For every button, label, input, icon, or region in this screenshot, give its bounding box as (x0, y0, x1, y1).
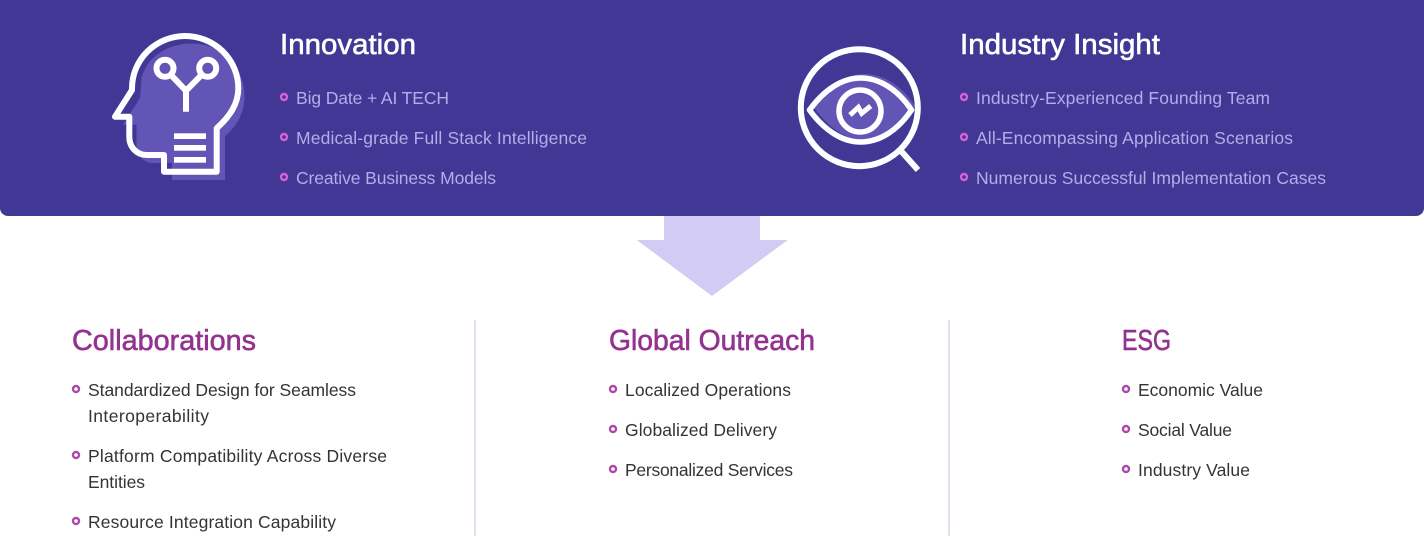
list: Innovation bullets: Medical-grade Full Stack Intelligence (296, 128, 587, 148)
list: Collaborations bullets (73, 380, 387, 532)
icon: magnifying glass with eye (801, 49, 918, 170)
list: Innovation bullets: Big Date + AI TECH (296, 88, 449, 108)
panel: ESG (1122, 325, 1263, 480)
list: Industry Insight bullets: Numerous Successful Implementation Cases (976, 168, 1326, 188)
list: Global Outreach bullets (610, 380, 793, 480)
panel: collaborations (72, 325, 387, 532)
heading: Industry Insight: Industry Insight (960, 29, 1160, 61)
list: Innovation bullets: Creative Business Models (296, 168, 496, 188)
heading: Innovation: Innovation (280, 29, 416, 61)
list: ESG bullets: Social Value (1138, 420, 1232, 440)
icon: head with circuit (115, 36, 244, 180)
top banner panel (0, 0, 1424, 216)
list: ESG bullets: Economic Value (1138, 380, 1263, 400)
panel: global outreach (609, 325, 815, 480)
list: Collaborations bullets: Platform Compatibility Across Diverse (88, 446, 387, 466)
heading: Collaborations: Collaborations (72, 325, 256, 357)
heading: ESG: ESG (1122, 325, 1171, 357)
list: Industry Insight bullets: All-Encompassing Application Scenarios (976, 128, 1293, 148)
list: Collaborations bullets: Entities (88, 472, 145, 492)
list: Global Outreach bullets: Personalized Services (625, 460, 793, 480)
list: Collaborations bullets: Resource Integration Capability (88, 512, 336, 532)
list: Collaborations bullets: Standardized Design for Seamless (88, 380, 356, 400)
list: Collaborations bullets: Interoperability (88, 406, 209, 426)
list: Innovation bullets (281, 88, 587, 188)
list: Global Outreach bullets: Localized Operations (625, 380, 791, 400)
arrow: pointing down (637, 216, 788, 296)
list: Industry Insight bullets: Industry-Experienced Founding Team (976, 88, 1270, 108)
list: Industry Insight bullets (961, 88, 1326, 188)
list: ESG bullets: Industry Value (1138, 460, 1250, 480)
list: Global Outreach bullets: Globalized Delivery (625, 420, 777, 440)
list: ESG bullets (1123, 380, 1263, 480)
heading: Global Outreach: Global Outreach (609, 325, 815, 357)
